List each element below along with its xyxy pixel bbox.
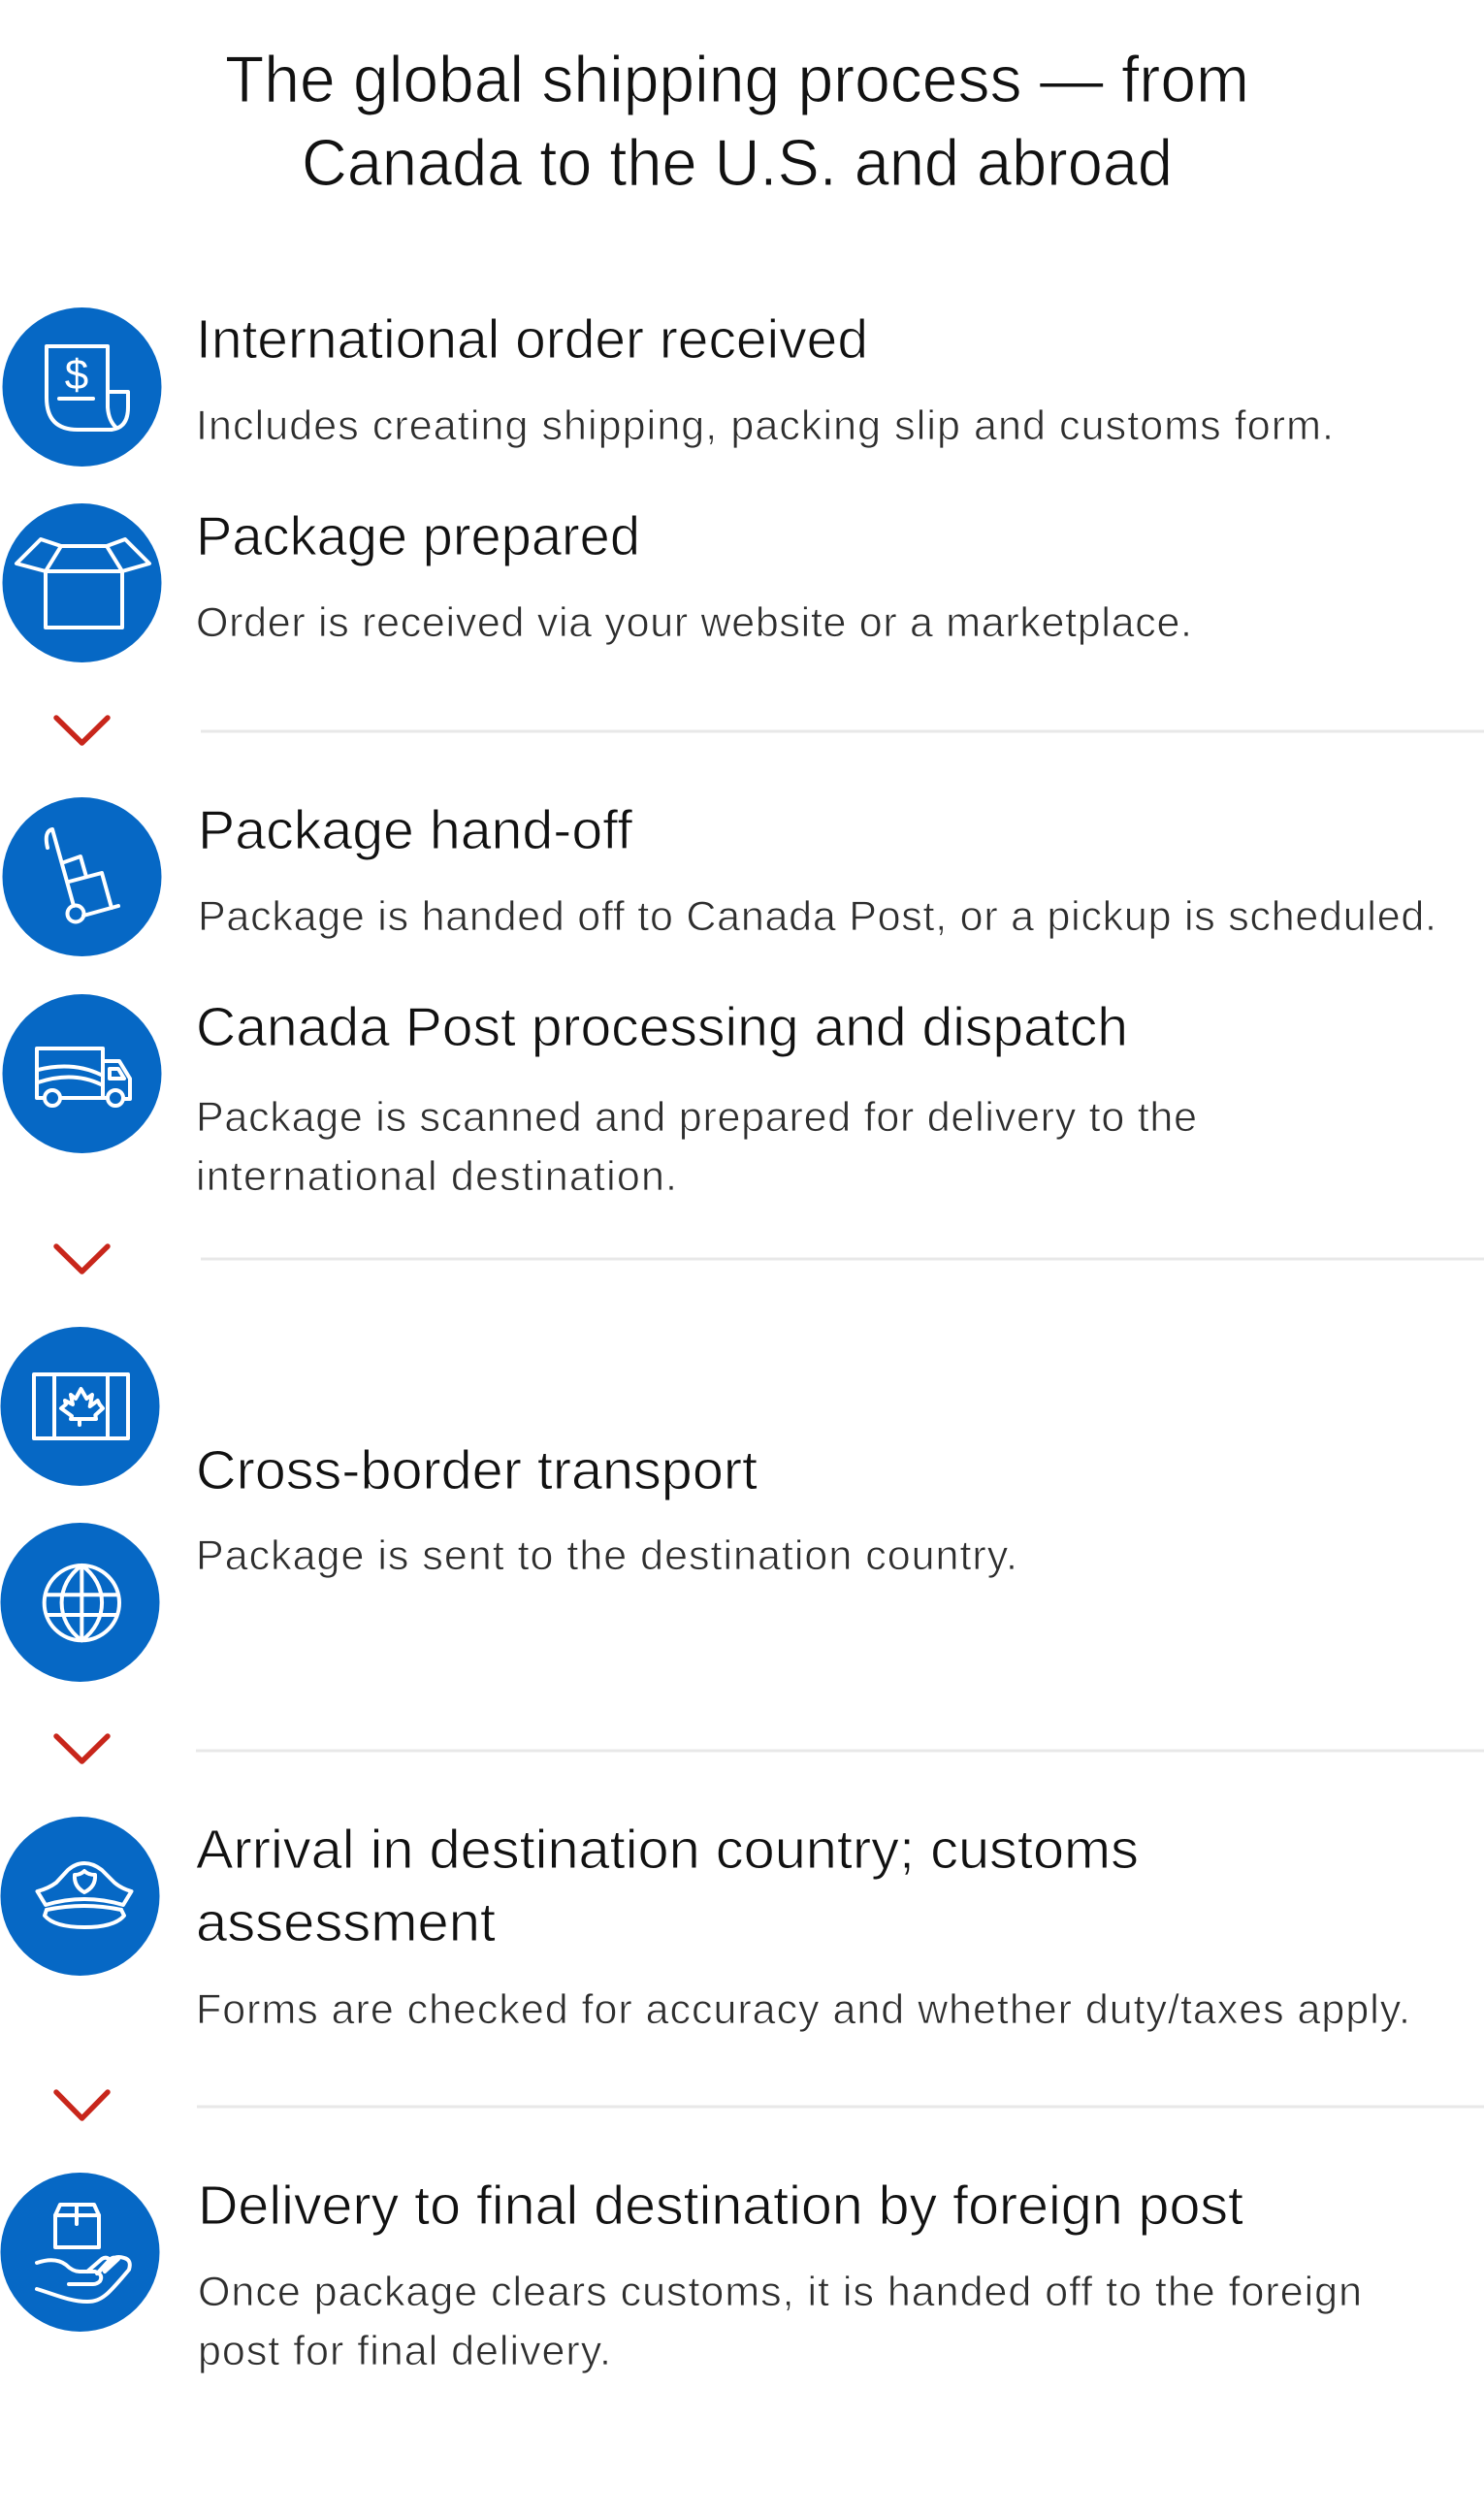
title [225,43,1249,200]
description: Package is handed off to Canada Post, or a pickup is scheduled. [198,893,1436,940]
heading: Canada Post processing and dispatch [196,996,1128,1058]
step: package prepared [2,503,1192,662]
description: Package is sent to the destination country. [196,1532,1017,1579]
title: The global shipping process — from [225,43,1249,116]
heading [196,1819,1139,1953]
heading: Delivery to final destination by foreign post [198,2175,1243,2237]
heading: Package prepared [196,505,640,567]
icon: globe [0,1523,159,1682]
icon: Canadian flag [0,1327,159,1486]
description: post for final delivery. [198,2328,611,2374]
description: Once package clears customs, it is handed off to the foreign [198,2269,1362,2315]
description: Package is scanned and prepared for delivery to the [196,1094,1197,1141]
description: Forms are checked for accuracy and whether duty/taxes apply. [196,1986,1410,2033]
heading: International order received [196,308,868,371]
description: Order is received via your website or a marketplace. [196,599,1192,646]
step: international order received [2,307,1334,467]
description: international destination. [196,1153,677,1200]
step: cross-border transport [0,1327,1017,1682]
icon: open box [2,503,161,662]
arrow: chevron down [56,718,108,743]
heading: Package hand-off [198,799,632,861]
title: Canada to the U.S. and abroad [302,126,1173,200]
step: package hand-off [2,797,1436,956]
arrow: chevron down [56,2092,108,2118]
step: delivery to final destination [0,2173,1362,2374]
heading: Arrival in destination country; customs [196,1819,1139,1881]
step: arrival and customs assessment [0,1817,1410,2033]
arrow: chevron down [56,1246,108,1272]
icon: hand holding package [0,2173,159,2332]
description [196,1094,1197,1200]
heading: assessment [196,1891,496,1953]
description [198,2269,1362,2374]
heading: Cross-border transport [196,1439,758,1501]
icon: delivery truck [2,994,161,1153]
step: Canada Post processing and dispatch [2,994,1197,1200]
icon: hand truck [2,797,161,956]
icon: receipt [2,307,161,467]
icon: customs officer cap [0,1817,159,1976]
arrow: chevron down [56,1736,108,1761]
icon: receipt: $ [65,351,88,399]
description: Includes creating shipping, packing slip and customs form. [196,403,1334,449]
